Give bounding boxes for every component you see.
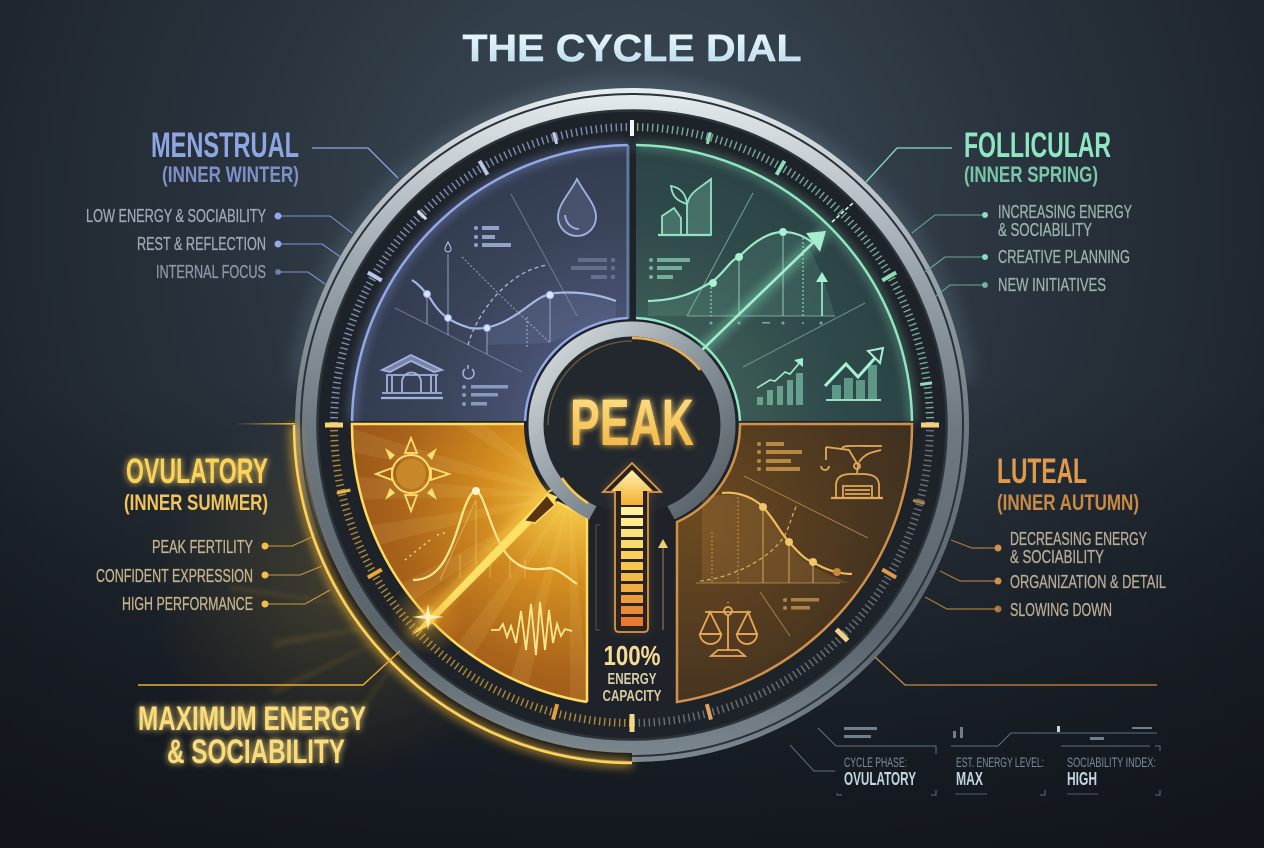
energy level value: MAX [956, 769, 983, 789]
dial [294, 90, 964, 763]
luteal list: DECREASING ENERGY [1010, 529, 1147, 549]
ovulatory list [96, 537, 253, 614]
warm glow: lower left [150, 400, 530, 780]
follicular connectors [912, 215, 985, 297]
list: menstrual right [571, 258, 615, 279]
list: menstrual top [474, 226, 511, 247]
callout: follicular [866, 126, 1132, 297]
readout mini bars [844, 726, 1152, 740]
list: follicular [649, 258, 690, 279]
glow rays: lower left [230, 585, 428, 764]
major ticks [325, 120, 939, 732]
center column [525, 318, 728, 711]
maximum energy text: MAXIMUM ENERGY [138, 700, 366, 738]
luteal list [1010, 529, 1166, 620]
menstrual dots [274, 212, 282, 275]
callout: menstrual [86, 126, 398, 284]
readout decorative lines [790, 728, 1160, 795]
callout: maximum energy [138, 651, 400, 771]
menstrual list [86, 206, 266, 282]
menstrual list: LOW ENERGY & SOCIABILITY [86, 206, 266, 226]
icon: crane machine [821, 446, 883, 498]
luteal list: SLOWING DOWN [1010, 600, 1112, 620]
luteal list: & SOCIABILITY [1010, 547, 1104, 567]
callout: ovulatory [96, 423, 330, 614]
icon: scales [700, 602, 757, 656]
follicular dots [982, 212, 988, 288]
icon: small growth bars [757, 358, 803, 405]
arrow: needle [412, 481, 568, 635]
chart: waveform [491, 602, 572, 655]
hub blue outer arc [525, 318, 628, 421]
ring glow [300, 90, 964, 380]
panel: luteal quadrant [677, 424, 912, 702]
arrow: green rising [700, 203, 853, 352]
hub gold arc [548, 341, 632, 425]
ring inner shadow [318, 110, 946, 740]
cycle phase label: CYCLE PHASE: [844, 754, 907, 770]
cycle phase value: OVULATORY [844, 769, 916, 789]
sociability value: HIGH [1067, 769, 1097, 789]
ovulatory subheading: (INNER SUMMER) [124, 490, 268, 515]
callout: luteal [875, 452, 1166, 685]
chart: fertility peak [405, 487, 577, 584]
luteal subheading: (INNER AUTUMN) [997, 490, 1139, 515]
luteal heading: LUTEAL [997, 452, 1087, 491]
icon: water drop [558, 179, 596, 236]
ring groove [301, 94, 963, 756]
follicular list: INCREASING ENERGY [998, 202, 1132, 222]
panel: ovulatory quadrant [340, 420, 590, 715]
ovulatory list: HIGH PERFORMANCE [122, 594, 253, 614]
list: luteal top [757, 442, 802, 471]
spark star [412, 604, 444, 630]
follicular list: & SOCIABILITY [998, 220, 1092, 240]
dial base disc [312, 105, 952, 745]
ovulatory list: CONFIDENT EXPRESSION [96, 566, 253, 586]
icon: cycle [463, 365, 474, 379]
list: menstrual lower [462, 385, 508, 406]
ovulatory line [235, 423, 295, 425]
sociability text: & SOCIABILITY [167, 733, 345, 771]
follicular list: NEW INITIATIVES [998, 275, 1106, 295]
follicular heading: FOLLICULAR [964, 126, 1111, 165]
icon: plant and building [658, 179, 711, 235]
hub gold lower arc [562, 478, 588, 503]
ovulatory heading: OVULATORY [126, 452, 268, 491]
follicular list: CREATIVE PLANNING [998, 247, 1130, 267]
arrow: small gauge arrow [596, 525, 668, 630]
energy gauge arrow [603, 463, 661, 632]
energy level label: EST. ENERGY LEVEL: [956, 754, 1044, 770]
menstrual list: INTERNAL FOCUS [156, 262, 266, 282]
list: luteal lower [783, 598, 819, 610]
menstrual connectors [278, 216, 352, 284]
energy column panel [590, 500, 675, 711]
readout underlines [955, 793, 1098, 795]
follicular list [998, 202, 1132, 295]
title: THE CYCLE DIAL [462, 28, 802, 70]
energy capacity value: 100% [604, 640, 661, 671]
menstrual list: REST & REFLECTION [137, 234, 266, 254]
luteal connectors [925, 540, 998, 609]
energy label: ENERGY [608, 671, 657, 688]
spark glow [390, 579, 466, 655]
icon: large growth bars [825, 348, 883, 400]
capacity label: CAPACITY [602, 688, 662, 705]
follicular subheading: (INNER SPRING) [964, 162, 1098, 187]
gauge segments [621, 507, 643, 626]
chart: rising curve [648, 193, 865, 367]
menstrual heading: MENSTRUAL [151, 126, 299, 165]
chart: decreasing curve [696, 476, 868, 636]
menstrual subheading: (INNER WINTER) [162, 162, 299, 187]
ovulatory connectors [265, 537, 330, 604]
hub ring [536, 329, 728, 521]
luteal list: ORGANIZATION & DETAIL [1010, 572, 1166, 592]
ovulatory list: PEAK FERTILITY [152, 537, 253, 557]
tick scale [334, 127, 930, 723]
outer silver ring [306, 99, 958, 751]
peak text: PEAK [570, 385, 694, 459]
luteal dots [994, 544, 1002, 612]
icon: sun [376, 438, 449, 511]
chart: low energy curve [395, 194, 616, 372]
sunrays [354, 426, 586, 700]
hub gold top arc [632, 338, 700, 370]
sociability label: SOCIABILITY INDEX: [1067, 754, 1156, 770]
panel: menstrual quadrant [352, 145, 628, 421]
hub core [544, 337, 720, 513]
lower-left ring darkening and glow arc [294, 425, 632, 763]
icon: temple [381, 355, 443, 398]
ovulatory dots [262, 542, 268, 608]
panel: status readout [790, 726, 1160, 795]
panel: follicular quadrant [628, 145, 912, 421]
